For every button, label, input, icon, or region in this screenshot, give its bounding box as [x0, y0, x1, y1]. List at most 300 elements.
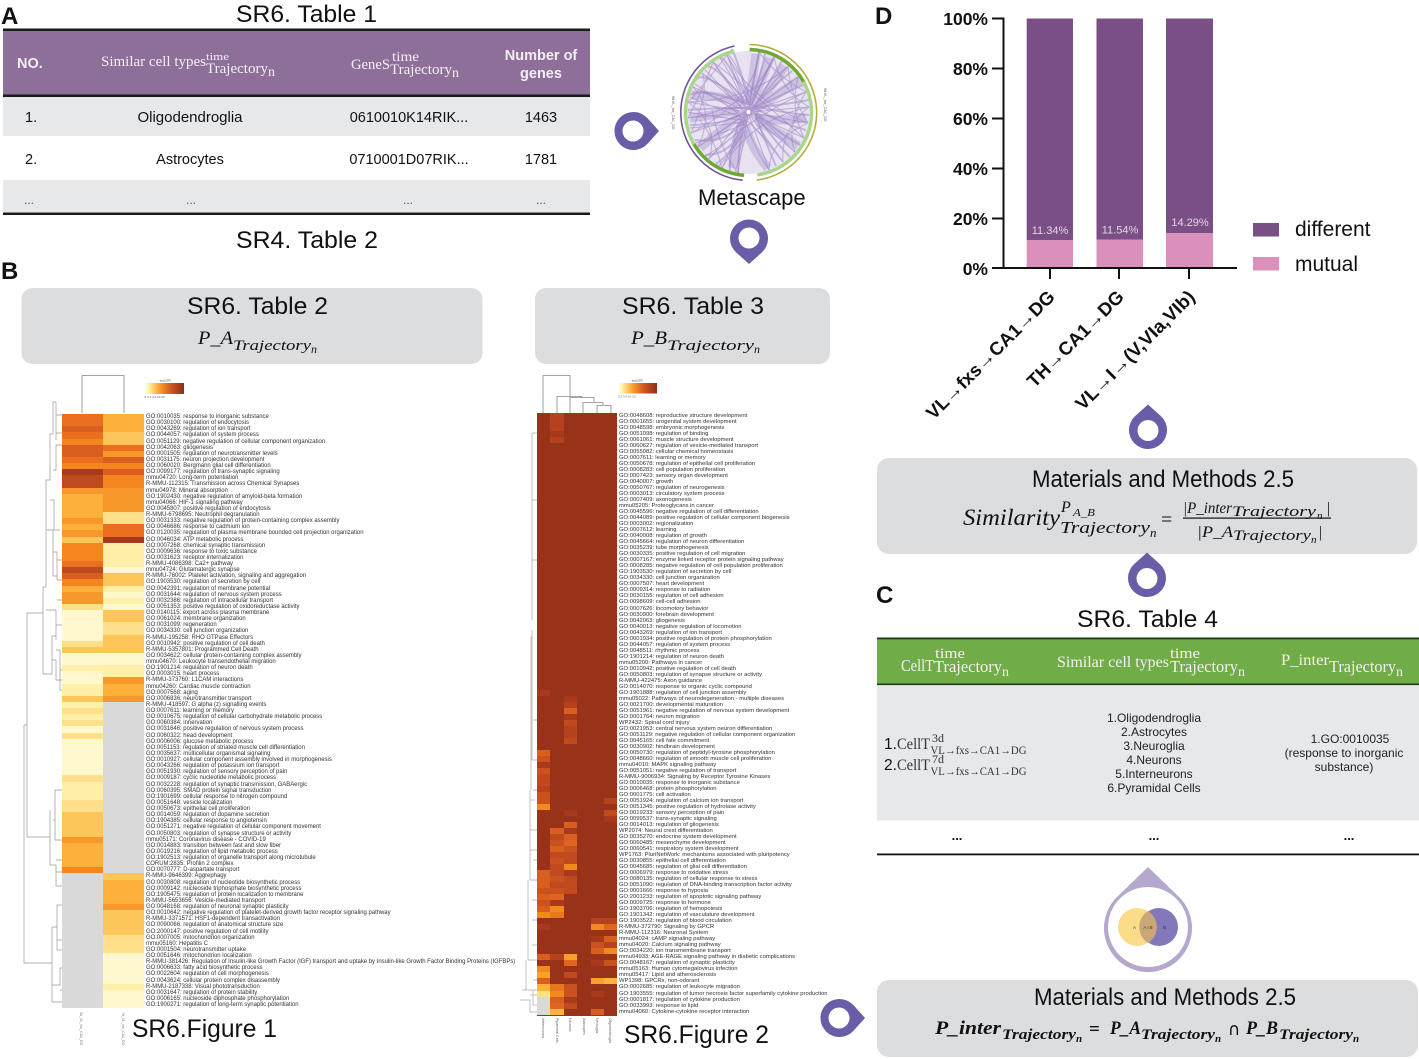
text: GO:0014883: transition between fast and slow fiber	[146, 843, 281, 849]
text: GO:0003002: regionalization	[619, 521, 693, 527]
table: SR6 Table 4: time	[1170, 646, 1200, 662]
label: SR6.Figure 2: SR6.Figure 2	[624, 1022, 769, 1049]
text: mmu04060: Cytokine-cytokine receptor interaction	[619, 1009, 749, 1015]
panel letter C: C	[876, 582, 893, 609]
table: SR6 Table 4: 4.Neurons	[1126, 753, 1182, 767]
text: GO:1903522: regulation of blood circulation	[619, 918, 732, 924]
table: SR6 Table 1: genes	[520, 66, 562, 82]
heatmap background: SR6 Figure 2	[537, 413, 617, 1016]
text: GO:0019233: sensory perception of pain	[619, 810, 724, 816]
text: GO:0050767: regulation of neurogenesis	[619, 485, 725, 491]
legend: left heatmap colour scale	[144, 378, 184, 399]
table: SR6 Table 4: CellT	[897, 757, 930, 774]
text: R-MMU-9006934: Signaling by Receptor Tyrosine Kinases	[619, 774, 770, 780]
table: SR6 Table 1: GeneS	[351, 57, 390, 73]
text: GO:0040013: negative regulation of locomotion	[619, 624, 741, 630]
text: GO:1903555: regulation of tumor necrosis factor superfamily cytokine production	[619, 990, 828, 996]
text: GO:0032228: regulation of synaptic transmission, GABAergic	[146, 782, 307, 788]
text: GO:0030902: hindbrain development	[619, 744, 715, 750]
box: Materials and Methods intersection formula: =	[1089, 1019, 1100, 1040]
icon: location pin pointing right (Figure 2)	[820, 999, 865, 1037]
text: WP2432: Spinal cord injury	[619, 720, 690, 726]
text: GO:0030808: regulation of nucleotide biosynthetic process	[146, 880, 300, 886]
text: GO:0031644: regulation of nervous system process	[146, 592, 282, 598]
text: GO:0051961: negative regulation of nervous system development	[619, 708, 789, 714]
text: GO:0061024: membrane organization	[146, 616, 246, 622]
text: GO:0044057: regulation of system process	[619, 642, 730, 648]
chord diagram: Metascape overlap: filt.VL_fxs_CA1_DG	[823, 88, 827, 122]
text: GO:0021700: developmental maturation	[619, 702, 723, 708]
text: GO:0001504: neurotransmitter uptake	[146, 947, 246, 953]
text: GO:0010642: negative regulation of platelet-derived growth factor receptor signaling pathway	[146, 910, 391, 916]
legend: different / mutual: mutual	[1295, 253, 1358, 276]
text: GO:0051098: regulation of binding	[619, 431, 708, 437]
text: GO:0043266: regulation of potassium ion transport	[146, 763, 279, 769]
box: Materials and Methods similarity formula: n	[1311, 534, 1317, 546]
text: GO:0007611: learning or memory	[619, 455, 706, 461]
text: WP1763: PluriNetWork: mechanisms associated with pluripotency	[619, 852, 790, 858]
text: GO:0043624: cellular protein complex disassembly	[146, 978, 280, 984]
text: GO:0051646: mitochondrion localization	[146, 953, 252, 959]
text: mmu04024: cAMP signaling pathway	[619, 936, 715, 942]
box: Materials and Methods similarity formula: |	[1318, 524, 1322, 541]
text: GO:0007626: locomotory behavior	[619, 606, 708, 612]
table: SR6 Table 4: 1.	[884, 736, 897, 753]
table: SR6 Table 1: ...	[536, 193, 546, 207]
stacked bar chart: 0%	[963, 259, 988, 279]
table: SR6 Table 1: 1.	[25, 110, 37, 126]
text: GO:0044089: positive regulation of cellular component biogenesis	[619, 515, 790, 521]
table: SR6 Table 1: ...	[403, 193, 413, 207]
text: GO:0009725: response to hormone	[619, 900, 711, 906]
text: GO:0060384: innervation	[146, 720, 212, 726]
table: SR6 Table 4: Trajectory	[1170, 657, 1239, 676]
label: SR6.Figure 1: SR6.Figure 1	[132, 1016, 277, 1043]
text: GO:0045685: regulation of glial cell differentiation	[619, 864, 747, 870]
axis labels: left heatmap columns: 7d_VL_fxs_CA1_DG	[121, 1012, 125, 1046]
dendrogram: left heatmap columns	[82, 376, 124, 413]
text: mmu04978: Mineral absorption	[146, 488, 228, 494]
box: SR6 Table 3: P_B	[630, 328, 667, 349]
box: Materials and Methods intersection formula: Materials and Methods 2.5	[1034, 984, 1296, 1011]
dendrogram: left heatmap rows	[24, 402, 62, 1002]
text: GO:0030335: positive regulation of cell migration	[619, 551, 745, 557]
text: GO:0051353: positive regulation of oxidoreductase activity	[146, 604, 299, 610]
title: SR6. Table 4: SR6. Table 4	[1077, 606, 1218, 633]
heatmap: SR6 Figure 2	[537, 413, 828, 1015]
text: GO:0048168: regulation of neuronal synaptic plasticity	[146, 904, 289, 910]
text: GO:1902513: regulation of organelle transport along microtubule	[146, 855, 316, 861]
box: Materials and Methods intersection formula: Trajectory	[1002, 1027, 1077, 1043]
text: R-MMU-373760: L1CAM interactions	[146, 677, 243, 683]
table: SR6 Table 4: ...	[952, 828, 962, 843]
icon: location pin pointing right (A)	[614, 112, 659, 150]
text: GO:0031646: positive regulation of nervous system process	[146, 726, 303, 732]
text: GO:0099177: regulation of trans-synaptic signaling	[146, 469, 280, 475]
text: GO:0060020: Bergmann glial cell differentiation	[146, 463, 271, 469]
axis labels: right heatmap columns	[541, 1018, 612, 1043]
table: SR6 Table 4: 1.GO:0010035	[1311, 732, 1390, 746]
text: GO:0003013: circulatory system process	[619, 491, 725, 497]
text: GO:0051090: regulation of DNA-binding transcription factor activity	[619, 882, 792, 888]
text: GO:0090066: regulation of anatomical structure size	[146, 922, 283, 928]
box: Materials and Methods intersection formula: n	[1353, 1033, 1359, 1045]
box: Materials and Methods intersection formula: P_A	[1109, 1018, 1141, 1039]
text: GO:0003015: heart process	[146, 671, 219, 677]
text: GO:0099537: trans-synaptic signaling	[619, 816, 717, 822]
text: GO:0045596: negative regulation of cell differentiation	[619, 509, 759, 515]
text: GO:0001505: regulation of neurotransmitter levels	[146, 451, 278, 457]
stacked bar chart: VL→fxs→CA1→DG	[922, 286, 1059, 423]
text: R-MMU-112315: Transmission across Chemical Synapses	[146, 481, 299, 487]
table: SR6 Table 4: 3.Neuroglia	[1123, 739, 1185, 753]
text: GO:0002685: regulation of leukocyte migration	[619, 984, 740, 990]
dendrogram: right heatmap columns	[543, 376, 611, 413]
icon: location pin pointing up (methods to table)	[1128, 552, 1166, 597]
box: Materials and Methods similarity formula: A_B	[1072, 507, 1095, 519]
text: mmu05200: Pathways in cancer	[619, 660, 702, 666]
table: SR6 Table 1: n	[452, 66, 459, 81]
text: GO:0030100: regulation of endocytosis	[146, 420, 249, 426]
text: WP2074: Neural crest differentiation	[619, 828, 713, 834]
text: GO:0120035: regulation of plasma membrane bounded cell projection organization	[146, 530, 364, 536]
text: GO:0019216: regulation of lipid metabolic process	[146, 849, 278, 855]
text: GO:0007005: mitochondrion organization	[146, 935, 255, 941]
text: GO:0060541: respiratory system development	[619, 846, 739, 852]
text: GO:0042391: regulation of membrane potential	[146, 586, 270, 592]
text: GO:0001934: positive regulation of protein phosphorylation	[619, 636, 772, 642]
text: R-MMU-2187338: Visual phototransduction	[146, 984, 260, 990]
text: R-MMU-381426: Regulation of Insulin-like Growth Factor (IGF) transport and uptake by Insulin-like Growth Factor Binding Proteins (IGFBPs)	[146, 959, 515, 965]
text: GO:0042063: gliogenesis	[146, 445, 213, 451]
text: mmu05417: Lipid and atherosclerosis	[619, 972, 716, 978]
box: Materials and Methods similarity formula: Trajectory	[1233, 528, 1312, 544]
text: mmu04720: Long-term potentiation	[146, 475, 238, 481]
table: SR6 Table 4: (response to inorganic	[1285, 746, 1403, 760]
text: GO:0048608: reproductive structure development	[619, 413, 747, 419]
table: SR6 Table 1: time	[206, 51, 229, 63]
text: GO:0048167: regulation of synaptic plasticity	[619, 960, 735, 966]
box: SR6 Table 3: Trajectory	[667, 338, 754, 354]
legend: different / mutual: different	[1295, 218, 1371, 241]
text: R-MMU-76002: Platelet activation, signaling and aggregation	[146, 573, 306, 579]
table: SR6 Table 4: 3d	[932, 731, 944, 745]
text: GO:0048598: embryonic morphogenesis	[619, 425, 724, 431]
stacked bar chart: 60%	[953, 109, 988, 129]
box: Materials and Methods intersection formula: Trajectory	[1141, 1027, 1216, 1043]
text: GO:0010942: positive regulation of cell death	[146, 641, 265, 647]
text: GO:0007568: aging	[146, 690, 198, 696]
text: GO:0033993: response to lipid	[619, 1003, 698, 1009]
box: SR6 Table 2: P_A	[197, 328, 233, 349]
dendrogram: right heatmap rows	[520, 433, 537, 1012]
text: GO:0031623: receptor internalization	[146, 555, 243, 561]
table: SR6 Table 1: ...	[24, 193, 34, 207]
text: GO:0007611: learning or memory	[146, 708, 234, 714]
box: Materials and Methods intersection formula: ∩	[1228, 1020, 1240, 1040]
icon: Venn diagram in drop: A	[1133, 925, 1136, 930]
text: GO:0006633: fatty acid biosynthetic process	[146, 965, 263, 971]
panel letter D: D	[875, 3, 892, 30]
panel letter A: A	[1, 3, 18, 30]
stacked bar chart: VL→I→(V,VIa,VIb)	[1071, 286, 1199, 414]
box: Materials and Methods similarity formula	[877, 458, 1417, 554]
stacked bar chart: 80%	[953, 59, 988, 79]
text: GO:0030855: epithelial cell differentiation	[619, 858, 726, 864]
text: mmu05022: Pathways of neurodegeneration - multiple diseases	[619, 696, 784, 702]
text: GO:0034330: cell junction organization	[619, 575, 720, 581]
text: GO:1901214: regulation of neuron death	[146, 665, 253, 671]
text: GO:0061061: muscle structure development	[619, 437, 734, 443]
box: Materials and Methods similarity formula: |P_A	[1197, 524, 1233, 541]
text: GO:0045165: cell fate commitment	[619, 738, 709, 744]
text: GO:0006979: response to oxidative stress	[619, 870, 728, 876]
box: Materials and Methods similarity formula: Similarity	[963, 505, 1061, 530]
table: SR6 Table 4: ...	[1344, 828, 1354, 843]
text: mmu04066: HIF-1 signaling pathway	[146, 500, 243, 506]
table: SR6 Table 4: 1.Oligodendroglia	[1107, 711, 1201, 725]
text: R-MMU-418597: G alpha (z) signalling events	[146, 702, 266, 708]
table: SR6 Table 1: time	[392, 50, 419, 65]
text: GO:0048511: rhythmic process	[619, 648, 699, 654]
box: Materials and Methods intersection formula	[877, 980, 1418, 1057]
text: GO:0001666: response to hypoxia	[619, 888, 708, 894]
text: GO:0050673: epithelial cell proliferation	[146, 806, 250, 812]
text: GO:0007268: chemical synaptic transmission	[146, 543, 265, 549]
text: GO:0006165: nucleoside diphosphate phosphorylation	[146, 996, 289, 1002]
text: GO:1903706: regulation of hemopoiesis	[619, 906, 722, 912]
box: Materials and Methods intersection formula: n	[1215, 1033, 1221, 1045]
icon: Venn diagram in drop: A∩B	[1143, 925, 1153, 930]
axis labels: right heatmap columns: Interneurons	[541, 1018, 545, 1038]
axis labels: right heatmap columns: Neurons	[568, 1018, 572, 1032]
legend: left heatmap colour scale: -log10(P)	[159, 378, 171, 382]
text: mmu04933: AGE-RAGE signaling pathway in diabetic complications	[619, 954, 795, 960]
text: GO:0080135: regulation of cellular response to stress	[619, 876, 757, 882]
table: SR6 Table 4: 2.	[884, 757, 897, 774]
table: SR6 Table 1: n	[268, 65, 275, 80]
text: GO:0140115: export across plasma membrane	[146, 610, 269, 616]
text: GO:0009142: nucleoside triphosphate biosynthetic process	[146, 886, 301, 892]
table: SR6 Table 1: ...	[186, 193, 196, 207]
text: GO:1904385: cellular response to angiotensin	[146, 818, 267, 824]
text: R-MMU-195258: RHO GTPase Effectors	[146, 634, 253, 640]
table: SR6 Table 4: P_inter	[1281, 652, 1330, 669]
axis labels: left heatmap columns: 3d_VL_fxs_CA1_DG	[79, 1012, 83, 1046]
text: GO:0009314: response to radiation	[619, 587, 710, 593]
text: GO:0031175: neuron projection development	[146, 457, 264, 463]
table: SR6 Table 1: 0610010K14RIK...	[350, 110, 468, 126]
text: CORUM:2835: Profilin 2 complex	[146, 861, 233, 867]
text: GO:0001775: cell activation	[619, 792, 691, 798]
table: SR6 Table 4: substance)	[1315, 760, 1373, 774]
table: SR6 Table 1: 2.	[25, 152, 37, 168]
table: SR6 Table 4: 6.Pyramidal Cells	[1107, 781, 1201, 795]
text: GO:0060627: regulation of vesicle-mediated transport	[619, 443, 758, 449]
table: SR6 Table 4: 5.Interneurons	[1115, 767, 1193, 781]
box: Materials and Methods similarity formula: n	[1150, 525, 1156, 540]
box: Materials and Methods similarity formula: =	[1161, 509, 1172, 531]
box: Materials and Methods similarity formula: |	[1326, 500, 1330, 517]
text: R-MMU-5653656: Vesicle-mediated transport	[146, 898, 265, 904]
box: SR6 Table 2	[22, 288, 482, 364]
table: SR6 Table 1: 1781	[525, 152, 557, 168]
text: GO:0060485: mesenchyme development	[619, 840, 726, 846]
table: SR6 Table 4: CellT	[901, 656, 934, 675]
text: GO:0051153: regulation of striated muscle cell differentiation	[146, 745, 305, 751]
table: SR6 Table 1: Trajectory	[390, 62, 452, 78]
text: GO:0045807: positive regulation of endocytosis	[146, 506, 271, 512]
text: R-MMU-6798695: Neutrophil degranulation	[146, 512, 260, 518]
text: GO:0098609: cell-cell adhesion	[619, 599, 701, 605]
text: GO:0014059: regulation of dopamine secretion	[146, 812, 269, 818]
box: Materials and Methods similarity formula: Materials and Methods 2.5	[1032, 466, 1294, 493]
text: GO:0051051: negative regulation of transport	[619, 768, 736, 774]
text: GO:0006468: protein phosphorylation	[619, 786, 716, 792]
text: mmu04670: Leukocyte transendothelial migration	[146, 659, 276, 665]
box: SR6 Table 2: Trajectory	[233, 338, 311, 354]
text: GO:0043269: regulation of ion transport	[146, 426, 251, 432]
text: mmu05205: Proteoglycans in cancer	[619, 503, 714, 509]
text: GO:0046686: response to cadmium ion	[146, 524, 250, 530]
legend: different / mutual	[1253, 218, 1371, 276]
table: SR6 Table 4: Trajectory	[934, 657, 1003, 676]
text: GO:0009187: cyclic nucleotide metabolic process	[146, 775, 276, 781]
text: GO:0034622: cellular protein-containing complex assembly	[146, 653, 301, 659]
text: mmu05160: Hepatitis C	[146, 941, 208, 947]
text: GO:0044057: regulation of system process	[146, 432, 259, 438]
text: GO:0050678: regulation of epithelial cell proliferation	[619, 461, 755, 467]
text: GO:1901699: cellular response to nitrogen compound	[146, 794, 287, 800]
box: Materials and Methods intersection formula: P_inter	[934, 1018, 1002, 1039]
text: GO:0007409: axonogenesis	[619, 497, 692, 503]
text: GO:0009636: response to toxic substance	[146, 549, 257, 555]
text: R-MMU-112316: Neuronal System	[619, 930, 708, 936]
stacked bar chart: TH→CA1→DG	[1022, 286, 1128, 391]
text: GO:0006006: glucose metabolic process	[146, 739, 253, 745]
axis labels: right heatmap columns: Astrocytes	[582, 1018, 586, 1035]
text: R-MMU-372790: Signaling by GPCR	[619, 924, 714, 930]
text: GO:0031647: regulation of protein stability	[146, 990, 257, 996]
icon: Venn diagram in drop	[1104, 867, 1192, 972]
table: SR6 Table 4: n	[1238, 665, 1245, 680]
text: GO:0021953: central nervous system neuron differentiation	[619, 726, 772, 732]
table: SR6 Table 4: CellT	[897, 736, 930, 753]
text: R-MMU-5357801: Programmed Cell Death	[146, 647, 259, 653]
stacked bar chart: 14.29%	[1171, 217, 1209, 229]
text: GO:0030900: forebrain development	[619, 612, 714, 618]
box: Materials and Methods intersection formula: n	[1076, 1033, 1082, 1045]
table: SR6 Table 4: VL→fxs→CA1→DG	[930, 745, 1026, 757]
icon: location pin pointing down	[730, 219, 768, 264]
axis labels: left heatmap columns	[79, 1012, 125, 1046]
text: GO:0042063: gliogenesis	[619, 618, 685, 624]
chord diagram: Metascape overlap	[671, 44, 827, 180]
table: SR6 Table 1: Astrocytes	[156, 152, 224, 168]
legend: right heatmap colour scale	[618, 378, 657, 398]
table: SR6 Table 4: VL→fxs→CA1→DG	[930, 766, 1026, 778]
axis labels: right heatmap columns: Neuroglia	[595, 1018, 599, 1033]
text: GO:0010927: cellular component assembly involved in morphogenesis	[146, 757, 332, 763]
text: GO:0051648: vesicle localization	[146, 800, 232, 806]
text: GO:0008283: cell population proliferation	[619, 467, 725, 473]
box: SR6 Table 2: n	[311, 342, 317, 356]
box: Materials and Methods similarity formula: n	[1317, 510, 1323, 522]
table: SR6 Table 4: n	[1396, 665, 1403, 680]
stacked bar chart: 11.54%	[1102, 224, 1138, 236]
text: GO:0050803: regulation of synapse structure or activity	[619, 672, 762, 678]
text: GO:0035637: multicellular organismal signaling	[146, 751, 270, 757]
text: GO:0051271: negative regulation of cellular component movement	[146, 824, 321, 830]
text: WP1398: GPCRs, non-odorant	[619, 978, 699, 984]
text: GO:0010035: response to inorganic substance	[146, 414, 269, 420]
table: SR6 Table 4: ...	[1149, 828, 1159, 843]
text: GO:0030155: regulation of cell adhesion	[619, 593, 724, 599]
label: Metascape: Metascape	[698, 185, 806, 210]
text: GO:0010675: regulation of cellular carbohydrate metabolic process	[146, 714, 322, 720]
text: GO:0007167: enzyme linked receptor protein signaling pathway	[619, 557, 784, 563]
text: GO:0051930: regulation of sensory perception of pain	[146, 769, 287, 775]
box: Materials and Methods intersection formula: Trajectory	[1279, 1027, 1354, 1043]
legend: right heatmap colour scale: -log10(P)	[631, 378, 643, 382]
table: SR6 Table 1: Oligodendroglia	[137, 109, 243, 126]
stacked bar chart: 20%	[953, 209, 988, 229]
box: Materials and Methods similarity formula: Trajectory	[1060, 518, 1151, 537]
text: R-MMU-3371571: HSF1-dependent transactivation	[146, 916, 280, 922]
stacked bar chart: 40%	[953, 159, 988, 179]
table: SR6 Table 4: n	[1002, 665, 1009, 680]
text: GO:0048660: regulation of smooth muscle cell proliferation	[619, 756, 771, 762]
text: GO:0006836: neurotransmitter transport	[146, 696, 252, 702]
text: mmu04020: Calcium signaling pathway	[619, 942, 721, 948]
text: GO:0051129: negative regulation of cellular component organization	[146, 438, 325, 444]
axis labels: right heatmap columns: Pyramidal Cells	[555, 1018, 559, 1043]
text: GO:0051345: positive regulation of hydrolase activity	[619, 804, 756, 810]
text: GO:0022604: regulation of cell morphogenesis	[146, 971, 269, 977]
box: Materials and Methods intersection formula: P_B	[1245, 1018, 1278, 1039]
text: GO:0031333: negative regulation of protein-containing complex assembly	[146, 518, 339, 524]
text: GO:1902430: negative regulation of amyloid-beta formation	[146, 494, 302, 500]
stacked bar chart: 11.34%	[1032, 225, 1068, 237]
box: Materials and Methods similarity formula: Trajectory	[1232, 504, 1317, 520]
table: SR6 Table 1: 0710001D07RIK...	[349, 152, 469, 168]
text: GO:0034220: ion transmembrane transport	[619, 948, 731, 954]
text: GO:0014013: regulation of gliogenesis	[619, 822, 719, 828]
box: Materials and Methods similarity formula: |P_inter	[1183, 500, 1233, 517]
box: SR6 Table 2: SR6. Table 2	[187, 293, 328, 320]
table: SR6 Table 4: time	[935, 646, 965, 662]
text: mmu05171: Coronavirus disease - COVID-19	[146, 837, 266, 843]
text: GO:1900271: regulation of long-term synaptic potentiation	[146, 1002, 298, 1008]
table: SR6 Table 1: 1463	[525, 110, 557, 126]
text: GO:0014070: response to organic cyclic compound	[619, 684, 752, 690]
text: GO:0050803: regulation of synapse structure or activity	[146, 830, 291, 836]
axis labels: right heatmap columns: Oligodendroglia	[608, 1018, 612, 1043]
box: SR6 Table 3	[535, 288, 830, 364]
title: SR4. Table 2: SR4. Table 2	[236, 227, 378, 254]
text: R-MMU-4086398: Ca2+ pathway	[146, 561, 233, 567]
table: SR6 Table 4: 2.Astrocytes	[1121, 725, 1187, 739]
text: GO:1901342: regulation of vasculature development	[619, 912, 754, 918]
table: SR6 Table 1	[3, 28, 590, 215]
text: GO:0045664: regulation of neuron differentiation	[619, 539, 744, 545]
text: GO:2000147: positive regulation of cell motility	[146, 928, 268, 934]
text: GO:1901888: regulation of cell junction assembly	[619, 690, 746, 696]
legend: right heatmap colour scale: 0 2 3 4 10 20	[618, 394, 636, 398]
text: GO:0034330: cell junction organization	[146, 628, 248, 634]
text: GO:0051924: regulation of calcium ion transport	[619, 798, 743, 804]
text: GO:0055082: cellular chemical homeostasis	[619, 449, 733, 455]
